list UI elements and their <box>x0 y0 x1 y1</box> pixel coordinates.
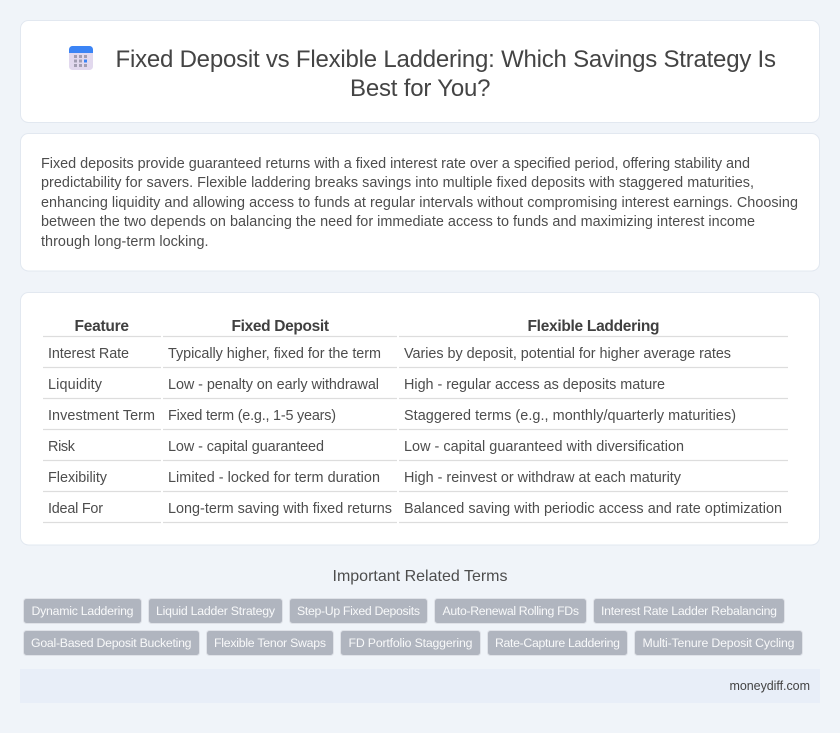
heading: related terms: Important Related Terms <box>332 568 508 585</box>
row: interest rate <box>48 346 731 362</box>
tag list: related terms: Interest Rate Ladder Rebalancing <box>601 604 777 618</box>
title: Best for You? <box>350 75 490 102</box>
tag list: related terms: Auto-Renewal Rolling FDs <box>442 604 579 618</box>
row: risk: Low - capital guaranteed <box>168 439 324 455</box>
tag list: related terms: Step-Up Fixed Deposits <box>297 604 420 618</box>
title <box>116 46 776 102</box>
row: investment term: Staggered terms (e.g., monthly/quarterly maturities) <box>404 408 736 424</box>
title: Fixed Deposit vs Flexible Laddering: Which Savings Strategy Is <box>116 46 776 73</box>
row: investment term: Fixed term (e.g., 1-5 years) <box>168 408 336 424</box>
row: risk: Low - capital guaranteed with diversification <box>404 439 684 455</box>
row: risk <box>48 439 684 455</box>
icon: calendar <box>69 46 93 70</box>
row: interest rate: Typically higher, fixed for the term <box>168 346 381 362</box>
text block: summary: enhancing liquidity and allowing access to funds at regular intervals without compromising interest earnings. Choosing <box>41 195 798 211</box>
tag list: related terms: Flexible Tenor Swaps <box>214 636 326 650</box>
row: investment term: Investment Term <box>48 408 155 424</box>
row: liquidity: High - regular access as deposits mature <box>404 377 665 393</box>
row: flexibility: Flexibility <box>48 470 108 486</box>
row: flexibility <box>48 470 682 486</box>
row: ideal for: Long-term saving with fixed returns <box>168 501 392 517</box>
row: flexibility: Limited - locked for term duration <box>168 470 380 486</box>
row: investment term <box>48 408 736 424</box>
table header: Flexible Laddering <box>528 318 660 335</box>
footer bar <box>20 669 820 703</box>
panel: comparison table <box>20 292 820 545</box>
table header: Feature <box>74 318 129 335</box>
row: ideal for: Balanced saving with periodic access and rate optimization <box>404 501 782 517</box>
row: ideal for: Ideal For <box>48 501 103 517</box>
tag list: related terms: FD Portfolio Staggering <box>348 636 473 650</box>
row: liquidity <box>48 377 665 393</box>
footer brand: moneydiff.com <box>730 679 810 693</box>
panel: header card <box>20 20 820 122</box>
row: risk: Risk <box>48 439 76 455</box>
row: interest rate: Interest Rate <box>48 346 129 362</box>
text block: summary: predictability for savers. Flexible laddering breaks savings into multiple fixed deposits with staggered maturities, <box>41 175 754 191</box>
table header <box>74 318 660 335</box>
tag list: related terms: Dynamic Laddering <box>32 604 134 618</box>
table header: Fixed Deposit <box>232 318 329 335</box>
tag list: related terms: Liquid Ladder Strategy <box>156 604 276 618</box>
row: flexibility: High - reinvest or withdraw at each maturity <box>404 470 682 486</box>
text block: summary: through long-term locking. <box>41 234 208 250</box>
text block: summary <box>41 156 798 250</box>
row: interest rate: Varies by deposit, potential for higher average rates <box>404 346 731 362</box>
row: liquidity: Liquidity <box>48 377 103 393</box>
tag list: related terms: Rate-Capture Laddering <box>495 636 620 650</box>
row: ideal for <box>48 501 782 517</box>
text block: summary: Fixed deposits provide guaranteed returns with a fixed interest rate over a specified period, offering stability and <box>41 156 750 172</box>
tag list: related terms: Goal-Based Deposit Bucketing <box>31 636 192 650</box>
panel: summary paragraph <box>20 134 820 271</box>
row: liquidity: Low - penalty on early withdrawal <box>168 377 379 393</box>
tag list: related terms: Multi-Tenure Deposit Cycling <box>642 636 795 650</box>
text block: summary: between the two depends on balancing the need for immediate access to funds and maximizing interest income <box>41 214 755 230</box>
tag list: related terms <box>24 598 802 656</box>
